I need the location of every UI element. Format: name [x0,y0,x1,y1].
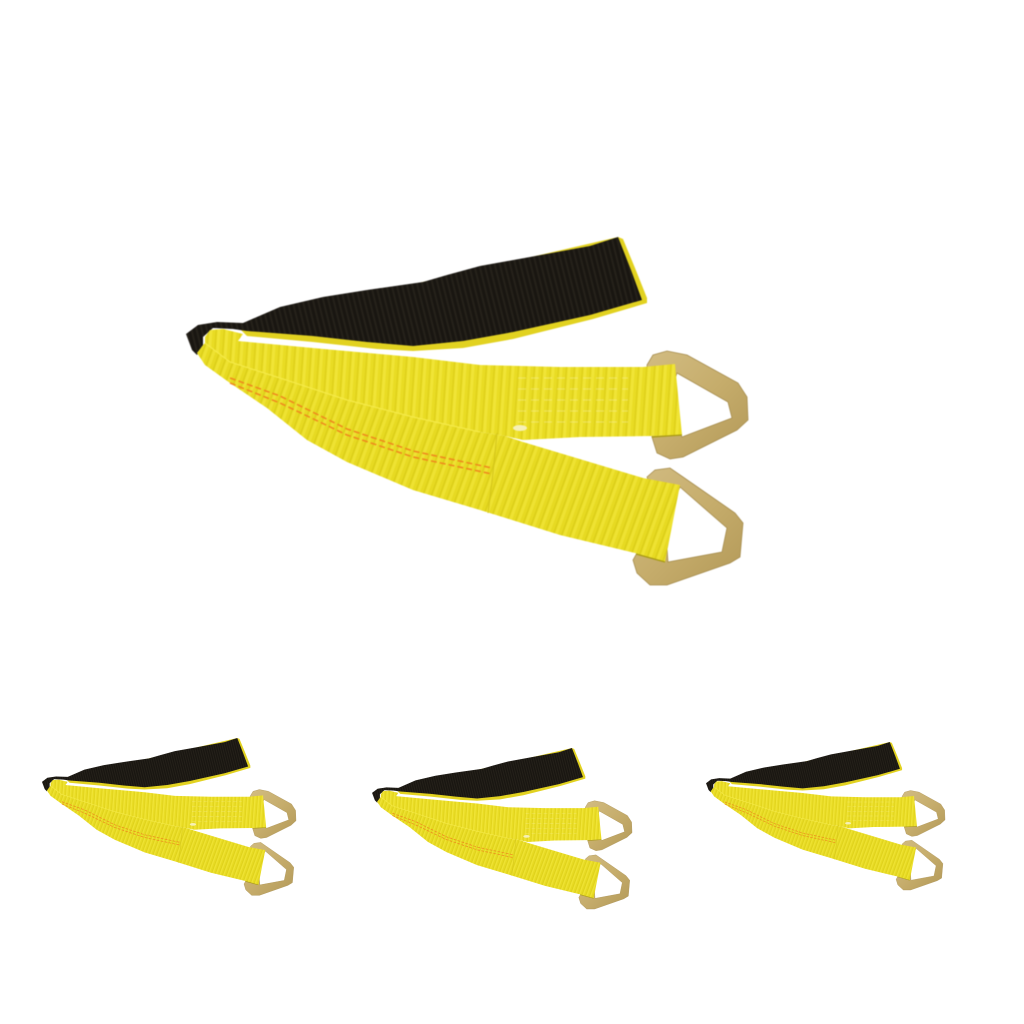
D-ring: lower [633,468,743,585]
sewn overlap seam [488,433,497,513]
thumbnail 3: axle strap [706,742,945,890]
upper yellow webbing leg [205,329,682,440]
lower yellow webbing leg [197,343,680,562]
orange bar tack stitching [230,378,492,474]
black strap edge: yellow backing [236,237,647,351]
cut end shadows [636,435,682,562]
worn spot at fork [513,425,527,431]
fold line between legs [205,343,480,432]
thumbnail 2: axle strap [372,748,632,909]
thumbnail 1: axle strap [42,738,296,895]
pale box stitching on upper leg [518,378,628,422]
D-ring: upper [647,351,748,459]
main product photo: axle strap with D-rings [186,237,748,585]
black protective sleeve [186,237,642,355]
